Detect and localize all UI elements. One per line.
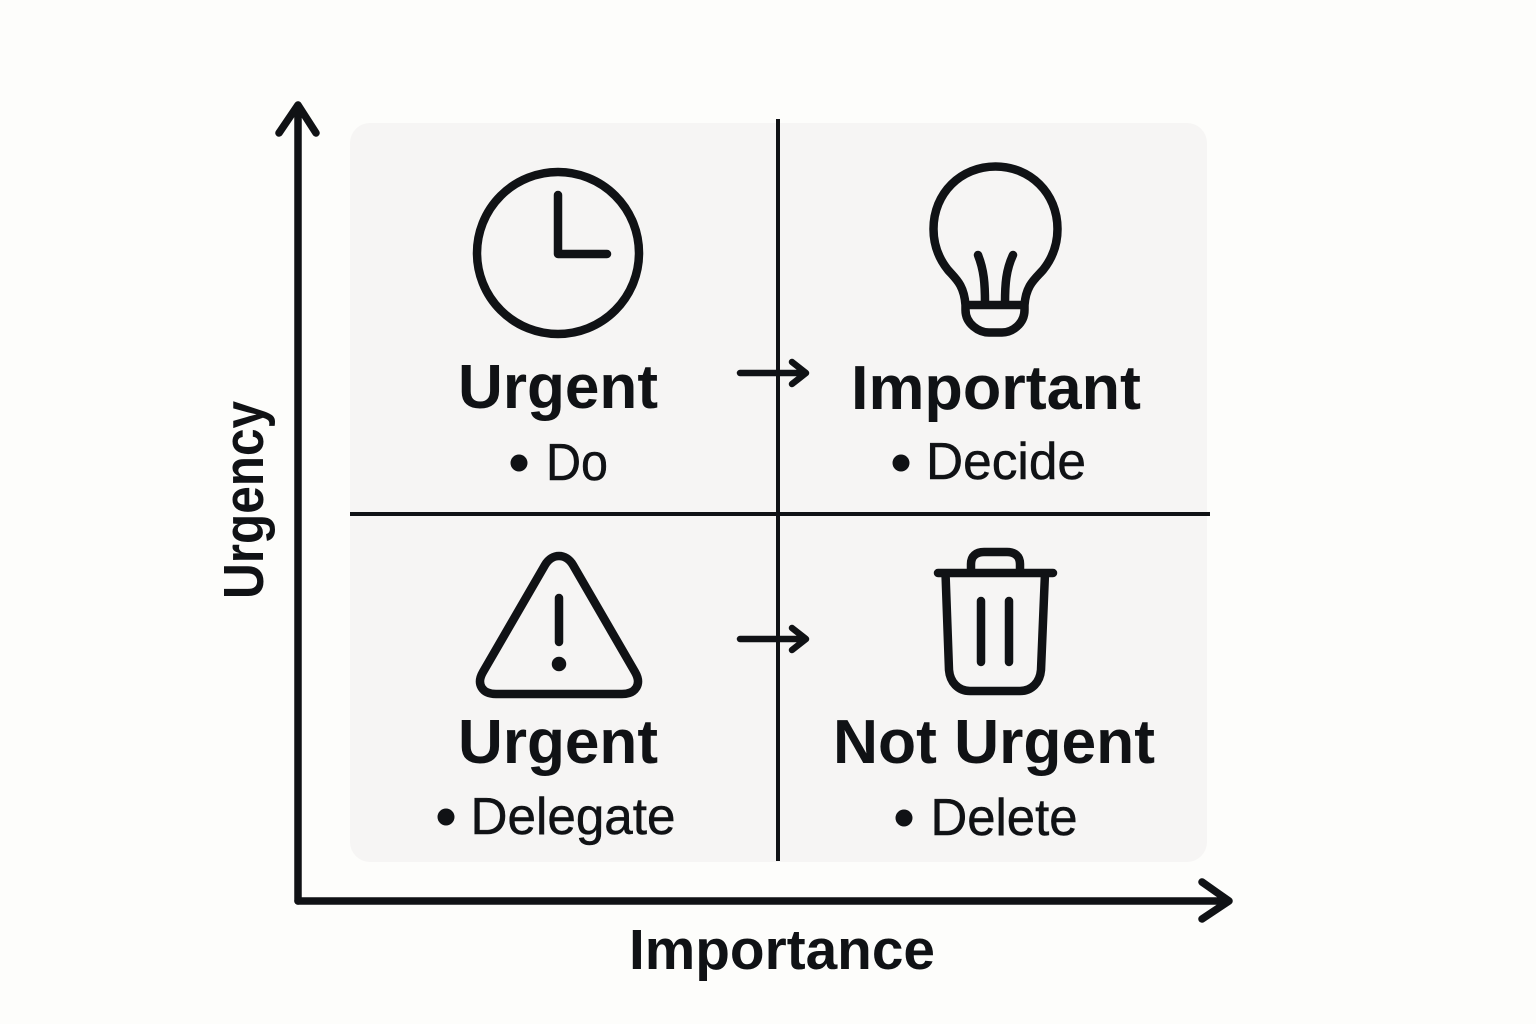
importance axis label: Importance — [629, 918, 935, 982]
heading: urgent delegate: Urgent — [458, 708, 658, 777]
text: delete: Delete — [930, 789, 1078, 847]
heading: urgent do: Urgent — [458, 353, 658, 422]
importance axis arrow — [298, 882, 1229, 919]
text: do: Do — [546, 434, 608, 492]
heading: important: Important — [851, 354, 1141, 423]
urgency axis label: Urgency — [212, 401, 276, 599]
text: do — [510, 434, 608, 492]
icon: trash can — [938, 552, 1053, 691]
text: delegate: Delegate — [470, 788, 676, 846]
arrow: bottom row — [740, 628, 806, 650]
icon: clock — [477, 172, 639, 334]
icon: light bulb — [934, 166, 1058, 332]
heading: not urgent: Not Urgent — [833, 708, 1155, 777]
vertical divider — [776, 119, 780, 861]
horizontal divider — [350, 512, 1210, 516]
matrix panel — [350, 123, 1207, 862]
arrow: top row — [740, 362, 806, 384]
text: decide: Decide — [926, 433, 1086, 491]
urgency axis arrow — [279, 105, 316, 901]
icon: warning triangle — [480, 556, 638, 694]
